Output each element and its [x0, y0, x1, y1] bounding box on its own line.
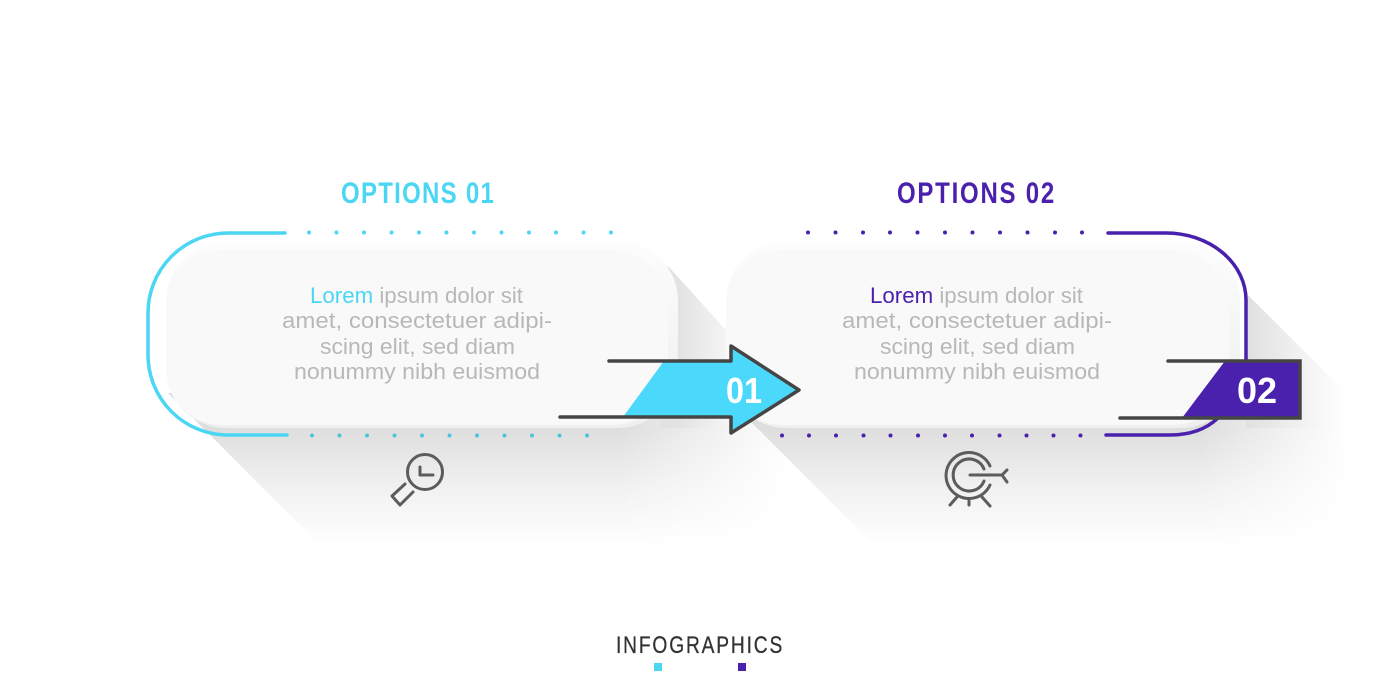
panel: option 1: [148, 230, 678, 438]
long shadow: panel 1: [168, 266, 746, 514]
panel 1 card face: [166, 250, 668, 425]
arrow: step 01: [560, 346, 799, 433]
number 01: 01: [726, 370, 762, 411]
heading: options 02: OPTIONS 02: [897, 175, 1056, 210]
panel 2 card body: [726, 241, 1240, 428]
text block: option 1: scing elit, sed diam: [320, 334, 515, 359]
icon: target with arrow: [946, 452, 1007, 506]
tag: step 02: [1120, 361, 1300, 418]
panel 2 top dots: [806, 230, 1084, 234]
heading: options 01: OPTIONS 01: [341, 175, 495, 210]
text block: option 2: [842, 283, 1112, 384]
icon: magnifier with clock: [392, 454, 442, 505]
panel 1 top dots: [307, 230, 613, 234]
text block: option 1: amet, consectetuer adipi-: [282, 308, 552, 333]
number 02: 02: [1237, 370, 1277, 411]
text block: option 1: nonummy nibh euismod: [294, 359, 540, 384]
panel 2 bottom dots: [780, 434, 1082, 438]
footer marker: purple: [738, 663, 746, 671]
panel 2 card face: [726, 250, 1229, 425]
text block: option 2: amet, consectetuer adipi-: [842, 308, 1112, 333]
long shadow: panel 2: [752, 294, 1318, 514]
text block: option 1: [282, 283, 552, 384]
text block: option 2: Lorem ipsum dolor sit: [870, 283, 1083, 308]
text block: option 1: Lorem ipsum dolor sit: [310, 283, 523, 308]
footer marker: cyan: [654, 663, 662, 671]
panel: option 2: [726, 230, 1246, 438]
panel 1 card body: [166, 241, 678, 428]
panel 1 outline: [148, 233, 287, 435]
panel 1 bottom dots: [310, 434, 589, 438]
text block: option 2: nonummy nibh euismod: [854, 359, 1100, 384]
text block: option 2: scing elit, sed diam: [880, 334, 1075, 359]
panel 2 outline: [1106, 233, 1246, 435]
footer title: INFOGRAPHICS: [616, 631, 784, 659]
